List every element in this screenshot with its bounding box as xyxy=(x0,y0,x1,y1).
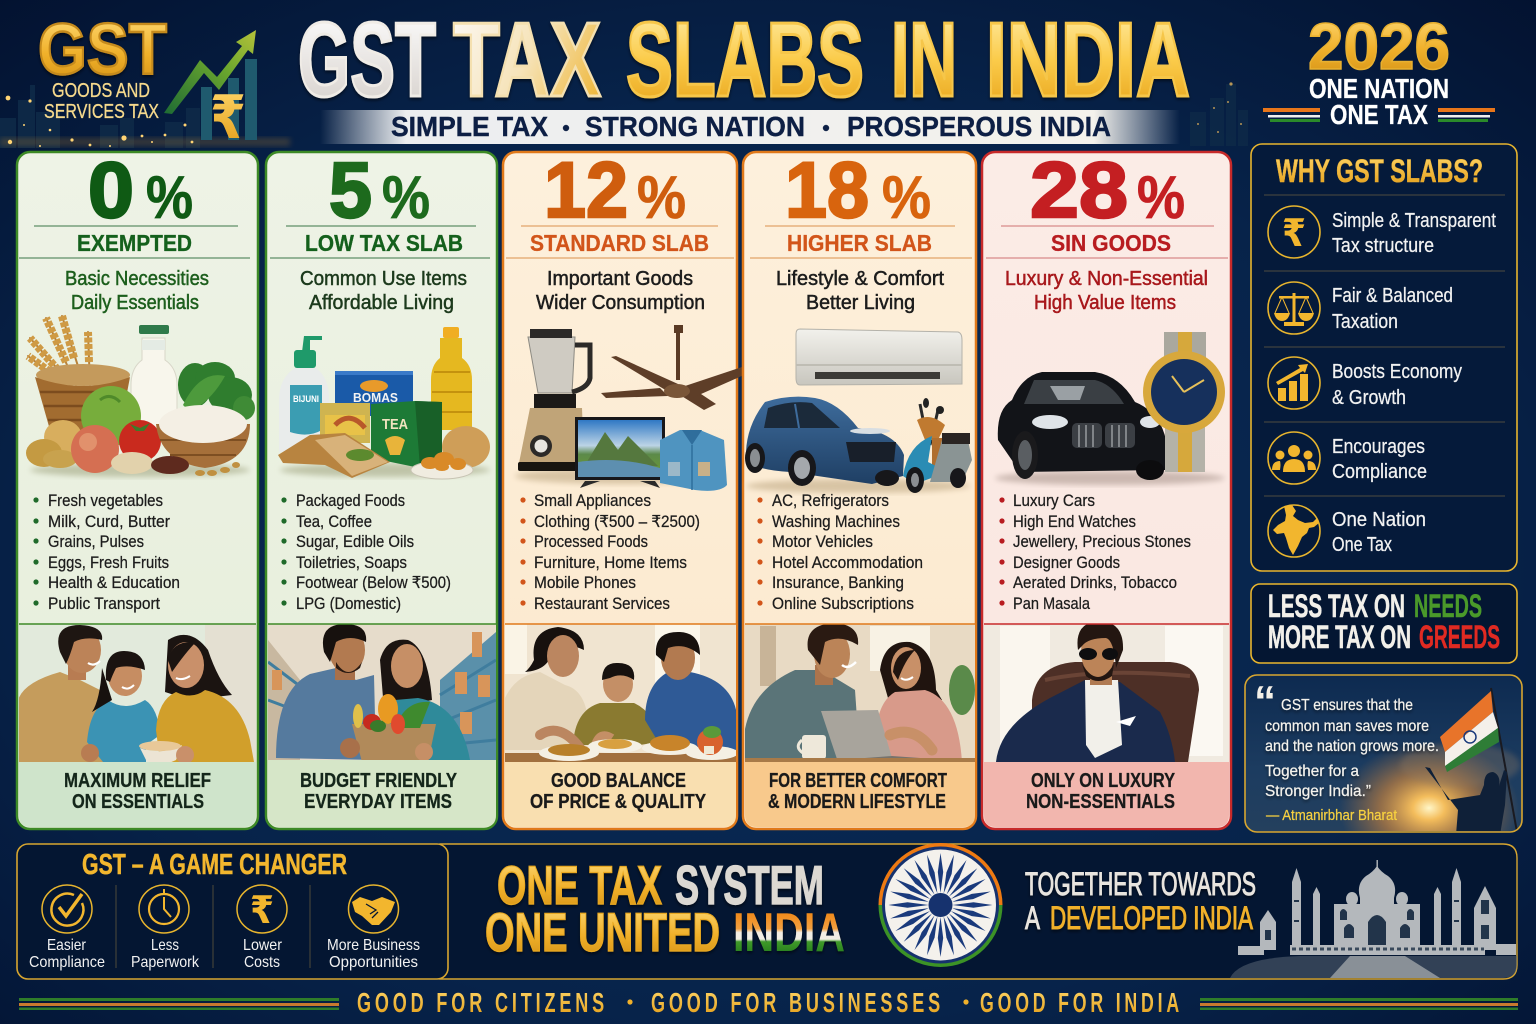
tagline xyxy=(1025,866,1256,936)
callout: less tax on needs, more tax on greeds: NEEDS xyxy=(1414,588,1482,624)
footer note xyxy=(268,760,496,827)
item list: Clothing (₹500 – ₹2500) xyxy=(534,513,700,531)
benefit: easier compliance: Easier xyxy=(47,937,87,954)
icon: flag xyxy=(1440,688,1517,832)
slab description: Important Goods xyxy=(547,268,693,290)
subtitle banner: PROSPEROUS INDIA xyxy=(847,111,1111,142)
item list: Footwear (Below ₹500) xyxy=(296,574,451,592)
footer note: BUDGET FRIENDLY xyxy=(300,770,458,792)
benefit: easier compliance xyxy=(29,885,105,971)
illustration: appliances xyxy=(515,325,744,491)
item list: Insurance, Banking xyxy=(772,574,904,592)
logo caption: SERVICES TAX xyxy=(44,101,159,123)
item list: Grains, Pulses xyxy=(48,533,144,551)
item list: Packaged Foods xyxy=(296,492,405,510)
illustration: luxury car and watch xyxy=(995,332,1225,485)
icon: ashoka chakra xyxy=(878,843,1002,967)
title: TAX xyxy=(453,1,601,119)
benefit: less paperwork: Less xyxy=(151,937,179,954)
tagline: TOGETHER TOWARDS xyxy=(1025,866,1256,902)
reason: encourages compliance: Encourages xyxy=(1332,436,1425,458)
reason: simple and transparent: Tax structure xyxy=(1332,235,1434,257)
item list: Mobile Phones xyxy=(534,574,636,592)
quote text: GST ensures that the xyxy=(1281,697,1413,714)
rate: 5% xyxy=(329,145,430,234)
callout: less tax on needs, more tax on greeds xyxy=(1251,584,1517,663)
item list: Health & Education xyxy=(48,574,180,592)
GST logo text: GST xyxy=(38,10,167,90)
quote text: Together for a xyxy=(1265,763,1359,780)
slab description xyxy=(776,268,944,314)
reason: fair and balanced: Fair & Balanced xyxy=(1332,285,1453,307)
rate: 0%: % xyxy=(146,164,193,231)
footer strip: GOOD FOR BUSINESSES xyxy=(651,987,944,1018)
slogan text: ONE TAX xyxy=(497,854,662,916)
slab label: LOW TAX SLAB xyxy=(305,230,463,256)
item list: Processed Foods xyxy=(534,533,648,551)
benefit: more business opportunities: Opportunities xyxy=(329,954,418,971)
rate: 12% xyxy=(544,145,686,234)
rate: 18%: 18 xyxy=(785,145,869,234)
footer note: FOR BETTER COMFORT xyxy=(769,770,947,792)
slab description xyxy=(65,268,209,314)
item list xyxy=(520,492,700,613)
slab label: EXEMPTED xyxy=(77,230,192,256)
item list: LPG (Domestic) xyxy=(296,595,401,613)
item list: Aerated Drinks, Tobacco xyxy=(1013,574,1177,592)
item list: AC, Refrigerators xyxy=(772,492,889,510)
slogan text: INDIA xyxy=(733,901,845,963)
slab description: Luxury & Non-Essential xyxy=(1005,268,1208,290)
item list: Hotel Accommodation xyxy=(772,554,923,572)
icon: rupee: ₹ xyxy=(210,84,246,151)
reason: simple and transparent: ₹ xyxy=(1282,213,1306,255)
photo: couple with grocery bag xyxy=(268,624,496,762)
title: INDIA xyxy=(986,1,1190,119)
callout: less tax on needs, more tax on greeds: LESS TAX ON xyxy=(1268,588,1405,624)
benefit: more business opportunities xyxy=(327,885,420,971)
slab description: Common Use Items xyxy=(300,268,467,290)
rate: 5%: % xyxy=(382,164,430,231)
rate: 5%: 5 xyxy=(329,145,372,234)
item list: Designer Goods xyxy=(1013,554,1120,572)
slab description xyxy=(300,268,467,314)
item list: Jewellery, Precious Stones xyxy=(1013,533,1191,551)
tagline: DEVELOPED INDIA xyxy=(1050,900,1253,936)
icon: growth arrow xyxy=(164,30,256,114)
reason: boosts economy: Boosts Economy xyxy=(1332,361,1462,383)
rate: 28%: 28 xyxy=(1030,145,1128,234)
rate: 28% xyxy=(1030,145,1185,234)
rate: 12%: % xyxy=(637,164,686,231)
panel: 12% standard slab xyxy=(503,145,744,829)
reason: one nation one tax xyxy=(1268,505,1426,557)
reason: simple and transparent xyxy=(1268,206,1496,258)
rate: 18%: % xyxy=(882,164,931,231)
benefit: less paperwork: Paperwork xyxy=(131,954,200,971)
footer note xyxy=(19,762,256,827)
rate: 12%: 12 xyxy=(544,145,628,234)
reason: simple and transparent: Simple & Transparent xyxy=(1332,210,1496,232)
photo: couple with laptop xyxy=(744,623,975,764)
footer note: EVERYDAY ITEMS xyxy=(304,791,452,813)
photo: man in luxury chair xyxy=(984,621,1229,762)
logo caption xyxy=(44,80,159,123)
item list: Online Subscriptions xyxy=(772,595,914,613)
photo: family with bowl xyxy=(18,624,256,764)
rate: 0%: 0 xyxy=(88,145,134,234)
item list: Restaurant Services xyxy=(534,595,670,613)
item list: Tea, Coffee xyxy=(296,513,372,531)
item list xyxy=(33,492,180,613)
callout: less tax on needs, more tax on greeds: MORE TAX ON xyxy=(1268,619,1411,655)
slab label: STANDARD SLAB xyxy=(530,230,709,256)
title xyxy=(298,1,1190,119)
subtitle banner xyxy=(320,110,1180,144)
panel: 18% higher slab xyxy=(743,145,976,829)
benefit: lower costs: ₹ xyxy=(250,890,274,932)
header logo: GST goods and services tax xyxy=(0,10,290,151)
title: SLABS xyxy=(626,1,864,119)
panel: 5% low tax slab xyxy=(266,145,497,829)
illustration: food essentials xyxy=(26,316,255,477)
panel heading: GST – A GAME CHANGER xyxy=(82,849,347,881)
benefit: more business opportunities: More Business xyxy=(327,937,420,954)
benefit: lower costs xyxy=(237,885,287,971)
rate: 18% xyxy=(785,145,931,234)
year badge: 2026 one nation one tax: ONE TAX xyxy=(1330,99,1428,130)
slab description: Wider Consumption xyxy=(536,292,705,314)
tagline: A xyxy=(1025,900,1040,936)
panel: 0% exempted xyxy=(17,145,258,829)
reason: fair and balanced: Taxation xyxy=(1332,311,1398,333)
footer note: ONLY ON LUXURY xyxy=(1031,770,1176,792)
slogan text: SYSTEM xyxy=(675,854,824,916)
illustration: Taj Mahal xyxy=(1230,858,1517,978)
subtitle banner: SIMPLE TAX xyxy=(391,111,548,142)
item list: Sugar, Edible Oils xyxy=(296,533,414,551)
item list xyxy=(757,492,923,613)
panel: why GST slabs xyxy=(1251,144,1517,571)
footer note: MAXIMUM RELIEF xyxy=(64,770,211,792)
footer note: & MODERN LIFESTYLE xyxy=(768,791,946,813)
illustration: packaged goods: BOMAS xyxy=(353,390,398,405)
footer strip: GOOD FOR INDIA xyxy=(980,987,1183,1018)
illustration: packaged goods xyxy=(278,327,490,479)
footer note: GOOD BALANCE xyxy=(551,770,686,792)
slab label: HIGHER SLAB xyxy=(787,230,932,256)
quote text xyxy=(1265,697,1439,800)
item list: High End Watches xyxy=(1013,513,1136,531)
reason: one nation one tax: One Nation xyxy=(1332,509,1426,531)
item list: Pan Masala xyxy=(1013,595,1091,613)
footer note xyxy=(984,762,1229,827)
item list: Toiletries, Soaps xyxy=(296,554,407,572)
benefit: less paperwork xyxy=(131,885,200,971)
title: IN xyxy=(891,1,957,119)
panel: 28% sin goods xyxy=(982,145,1231,829)
benefit: lower costs: Costs xyxy=(244,954,280,971)
item list: Motor Vehicles xyxy=(772,533,873,551)
slab description: Affordable Living xyxy=(309,292,454,314)
item list: Fresh vegetables xyxy=(48,492,163,510)
panel: banner one tax system xyxy=(440,843,1517,979)
item list: Public Transport xyxy=(48,595,160,613)
rate: 0% xyxy=(88,145,193,234)
slab description: Daily Essentials xyxy=(71,292,199,314)
reason: encourages compliance xyxy=(1268,432,1427,484)
year badge: 2026 one nation one tax: 2026 xyxy=(1308,9,1450,83)
slab description: High Value Items xyxy=(1034,292,1176,314)
rate: 28%: % xyxy=(1137,164,1185,231)
item list: Eggs, Fresh Fruits xyxy=(48,554,169,572)
quote attribution: — Atmanirbhar Bharat xyxy=(1266,807,1398,824)
benefit: lower costs: Lower xyxy=(243,937,283,954)
reason: encourages compliance: Compliance xyxy=(1332,461,1427,483)
quote panel xyxy=(1244,674,1523,833)
slogan text xyxy=(485,854,845,963)
item list: Milk, Curd, Butter xyxy=(48,513,170,531)
quote text: Stronger India.” xyxy=(1265,783,1371,800)
item list: Washing Machines xyxy=(772,513,900,531)
footer note: NON-ESSENTIALS xyxy=(1026,791,1175,813)
item list: Luxury Cars xyxy=(1013,492,1095,510)
slab description: Basic Necessities xyxy=(65,268,209,290)
slogan text: ONE UNITED xyxy=(485,901,720,963)
item list xyxy=(281,492,451,613)
item list xyxy=(999,492,1191,613)
item list: Small Appliances xyxy=(534,492,651,510)
slab description xyxy=(536,268,705,314)
slab description: Better Living xyxy=(806,292,915,314)
reason: boosts economy xyxy=(1268,357,1462,409)
reason: boosts economy: & Growth xyxy=(1332,387,1406,409)
illustration: packaged goods: TEA xyxy=(382,416,408,433)
footer note xyxy=(505,762,736,827)
benefit: easier compliance: Compliance xyxy=(29,954,105,971)
photo: family at dinner table xyxy=(504,624,738,765)
footer note: ON ESSENTIALS xyxy=(72,791,204,813)
silhouette: person raising flag xyxy=(1425,767,1507,835)
illustration: air conditioner, car and scooter xyxy=(745,329,972,493)
reason: one nation one tax: One Tax xyxy=(1332,534,1392,556)
illustration: packaged goods: BIJUNI xyxy=(293,394,319,404)
slab label: SIN GOODS xyxy=(1051,230,1171,256)
subtitle banner: STRONG NATION xyxy=(585,111,805,142)
logo caption: GOODS AND xyxy=(52,80,150,102)
footer note xyxy=(745,762,975,827)
footer strip: GOOD FOR CITIZENS xyxy=(357,987,608,1018)
year badge: 2026 one nation one tax xyxy=(1263,9,1495,130)
slab description: Lifestyle & Comfort xyxy=(776,268,944,290)
title: GST xyxy=(298,1,436,119)
item list: Furniture, Home Items xyxy=(534,554,687,572)
quote text: and the nation grows more. xyxy=(1265,738,1439,755)
quote mark: “ xyxy=(1254,677,1276,726)
footer strip xyxy=(19,987,1518,1018)
slab description xyxy=(1005,268,1208,314)
city skyline right xyxy=(1190,82,1248,146)
year badge: 2026 one nation one tax: ONE NATION xyxy=(1309,73,1449,104)
footer note: OF PRICE & QUALITY xyxy=(530,791,707,813)
panel: GST a game changer xyxy=(17,844,448,979)
reason: fair and balanced xyxy=(1268,282,1453,334)
quote text: common man saves more xyxy=(1265,718,1429,735)
